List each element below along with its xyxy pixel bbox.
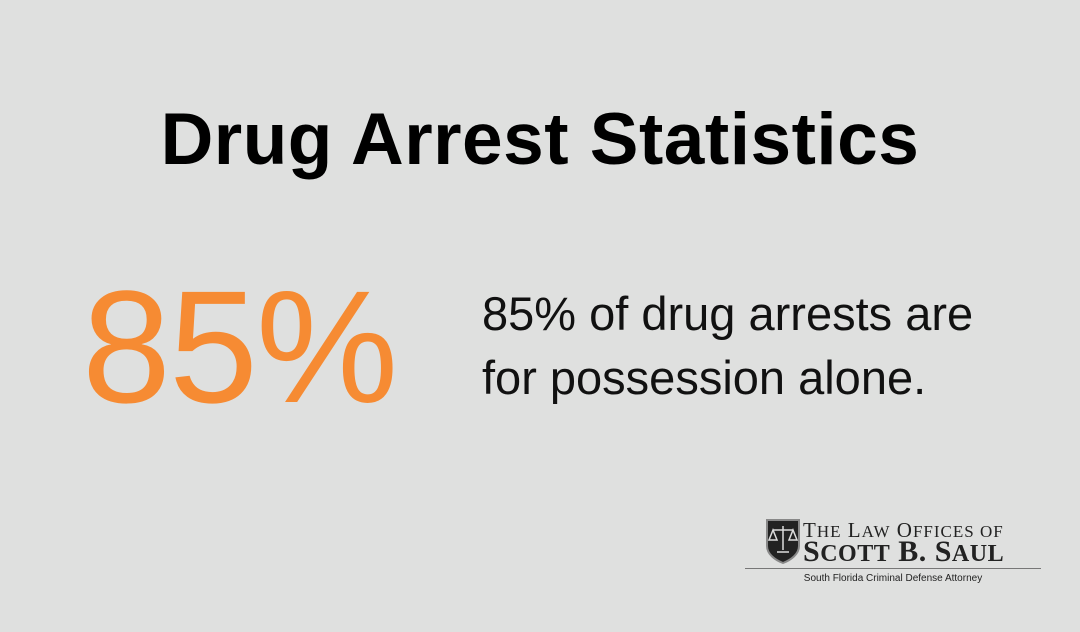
logo <box>745 518 1041 584</box>
description text <box>482 287 973 404</box>
description text: 85% of drug arrests are <box>482 287 973 340</box>
tagline: South Florida Criminal Defense Attorney <box>804 573 982 584</box>
firm name: THE LAW OFFICES OF <box>803 518 1004 542</box>
icon: shield with scales <box>766 519 800 564</box>
big stat: 85% <box>82 257 396 436</box>
logo: SCOTT B. SAUL <box>803 535 1004 568</box>
description text: for possession alone. <box>482 351 926 404</box>
title: Drug Arrest Statistics <box>161 99 919 180</box>
